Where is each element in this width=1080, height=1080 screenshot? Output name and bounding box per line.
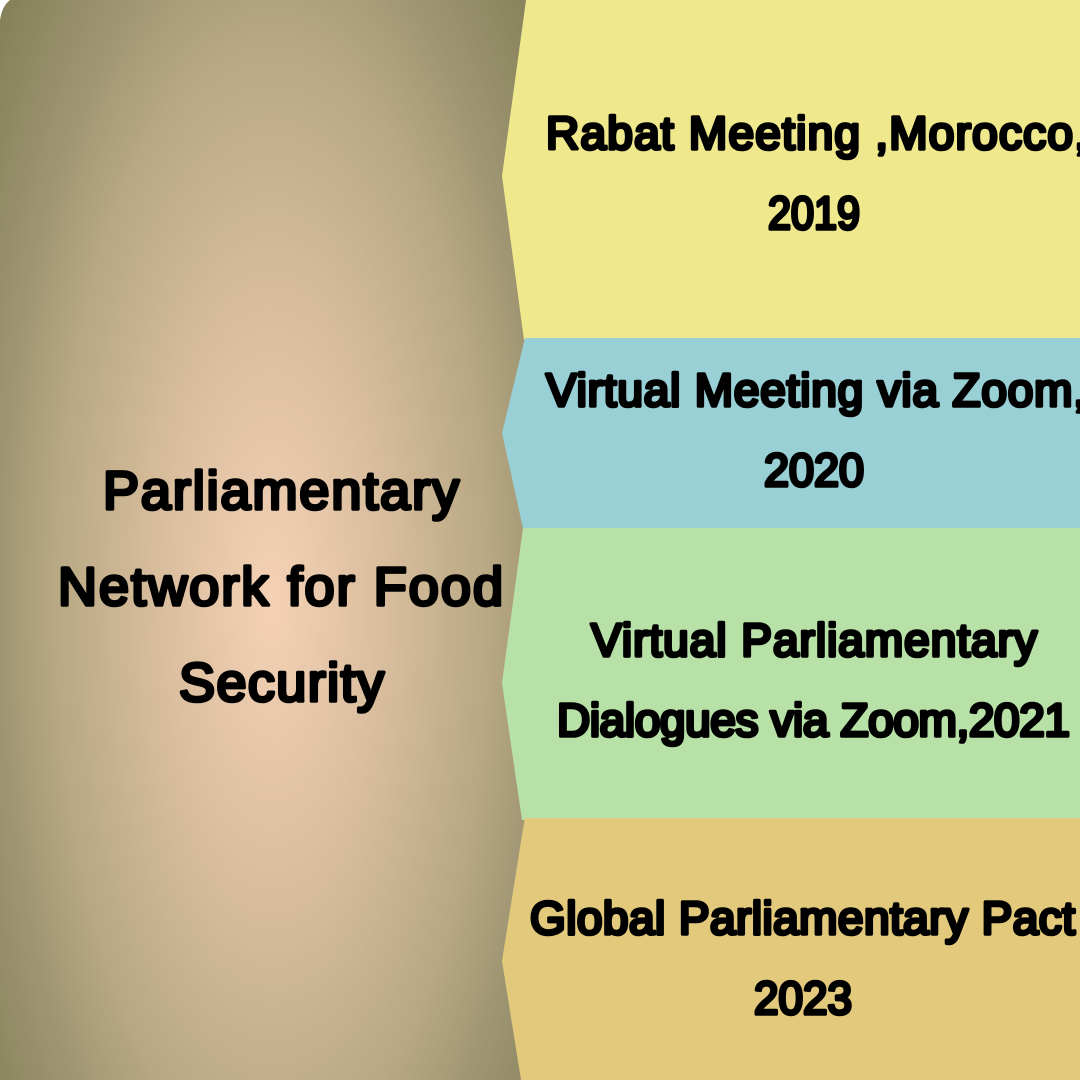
panel: central gradient background	[0, 0, 526, 1080]
panel: Global Parliamentary Pact 2023	[502, 818, 1080, 1080]
text: Virtual Parliamentary Dialogues: Virtual Parliamentary	[591, 614, 1037, 666]
text: Rabat Meeting: 2019	[768, 187, 860, 239]
text: Global Parliamentary Pact: 2023	[754, 972, 852, 1024]
text: Virtual Meeting: Virtual Meeting via Zoom,	[546, 364, 1080, 416]
panel: Virtual Parliamentary Dialogues 2021	[502, 528, 1080, 820]
text: Virtual Meeting	[546, 364, 1080, 496]
heading: Parliamentary Network for Food Security: Security	[179, 653, 384, 713]
text: Rabat Meeting	[546, 107, 1080, 239]
text: Rabat Meeting: Rabat Meeting ,Morocco,	[546, 107, 1080, 159]
panel: Rabat Meeting 2019	[502, 0, 1080, 340]
panel: Virtual Meeting 2020	[502, 338, 1080, 528]
heading: Parliamentary Network for Food Security	[58, 461, 503, 713]
text: Virtual Meeting: 2020	[764, 444, 864, 496]
heading: Parliamentary Network for Food Security: Network for Food	[58, 557, 503, 617]
text: Global Parliamentary Pact: Global Parliamentary Pact	[530, 892, 1075, 944]
text: Virtual Parliamentary Dialogues	[557, 614, 1070, 746]
text: Global Parliamentary Pact	[530, 892, 1075, 1024]
text: Virtual Parliamentary Dialogues: Dialogues via Zoom,2021	[557, 694, 1070, 746]
heading: Parliamentary Network for Food Security: Parliamentary	[103, 461, 459, 521]
